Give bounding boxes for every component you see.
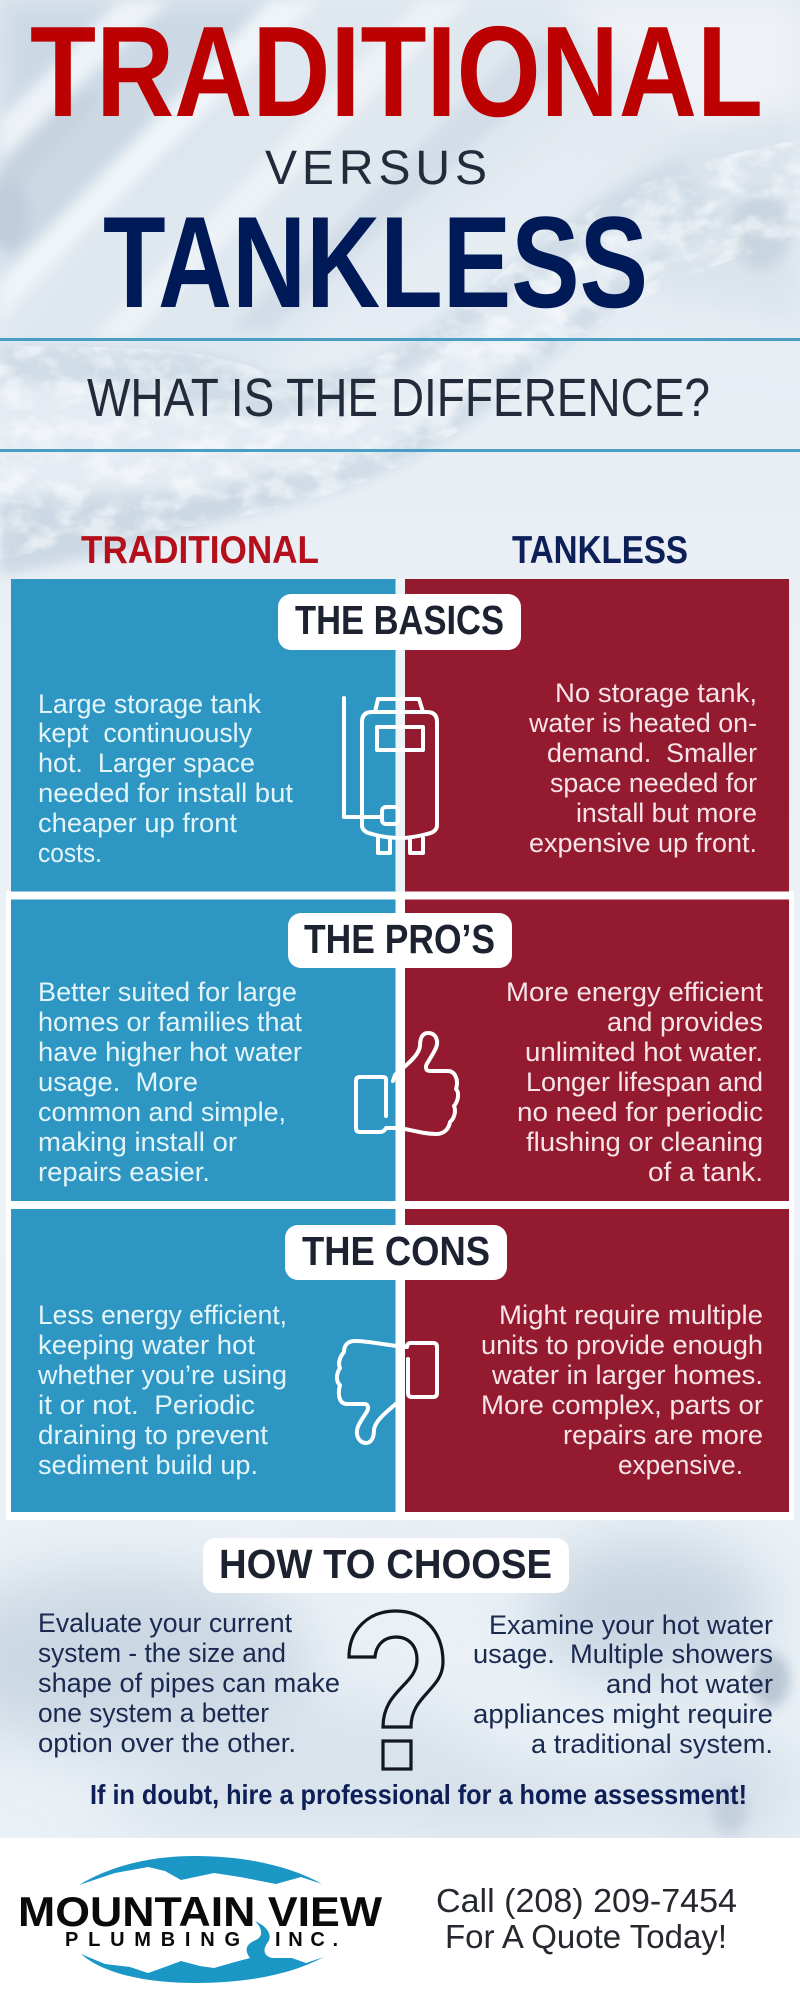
heading chip: the basics: THE BASICS bbox=[295, 597, 504, 643]
tankless basics text: water is heated on- bbox=[528, 708, 757, 738]
divider line bottom bbox=[0, 449, 800, 452]
tankless basics text: No storage tank, bbox=[555, 678, 757, 708]
heading chip: the pros: THE PRO’S bbox=[304, 916, 495, 962]
traditional cons text: Less energy efficient, bbox=[38, 1300, 287, 1330]
white panel backing bbox=[6, 891, 794, 1520]
left choose text bbox=[38, 1608, 340, 1758]
right choose text: appliances might require bbox=[473, 1699, 773, 1729]
traditional basics text: needed for install but bbox=[38, 778, 293, 808]
traditional pros text: Better suited for large bbox=[38, 977, 297, 1007]
left choose text: Evaluate your current bbox=[38, 1608, 292, 1638]
logo top arc bbox=[79, 1856, 322, 1885]
icon: thumbs down bbox=[337, 1341, 437, 1443]
divider line top bbox=[0, 338, 800, 341]
icon: question mark bbox=[349, 1611, 443, 1769]
tankless basics text: demand. Smaller bbox=[547, 738, 757, 768]
panel: the cons bbox=[11, 1209, 789, 1512]
traditional pros text: have higher hot water bbox=[38, 1037, 302, 1067]
tankless pros text: of a tank. bbox=[648, 1157, 763, 1187]
logo inc: INC. bbox=[275, 1929, 338, 1951]
cons tankless background bbox=[405, 1209, 789, 1512]
title: VERSUS: VERSUS bbox=[265, 142, 487, 195]
section: how to choose bbox=[38, 1538, 773, 1810]
callout: hire a professional: If in doubt, hire a professional for a home assessment! bbox=[90, 1779, 747, 1810]
cons traditional background bbox=[11, 1209, 396, 1512]
right choose text bbox=[473, 1610, 773, 1759]
tankless pros text: no need for periodic bbox=[517, 1097, 763, 1127]
footer band bbox=[0, 1838, 800, 2000]
icon: water heater bbox=[344, 698, 437, 853]
tankless cons text: More complex, parts or bbox=[481, 1390, 763, 1420]
right choose text: and hot water bbox=[606, 1669, 773, 1699]
traditional pros text: homes or families that bbox=[38, 1007, 302, 1037]
tankless basics text: install but more bbox=[576, 798, 757, 828]
tankless cons text: Might require multiple bbox=[499, 1300, 763, 1330]
traditional basics text: costs. bbox=[38, 838, 102, 868]
traditional cons text: sediment build up. bbox=[38, 1450, 258, 1480]
traditional cons text bbox=[37, 1300, 287, 1480]
tankless pros text bbox=[506, 977, 764, 1187]
tankless cons text: repairs are more bbox=[563, 1420, 763, 1450]
right choose text: a traditional system. bbox=[531, 1729, 773, 1759]
tankless pros text: More energy efficient bbox=[506, 977, 764, 1007]
panel: the basics bbox=[11, 579, 789, 892]
traditional cons text: keeping water hot bbox=[38, 1330, 256, 1360]
tankless pros text: flushing or cleaning bbox=[526, 1127, 763, 1157]
call to action: Call (208) 209-7454 bbox=[436, 1882, 737, 1919]
basics traditional background bbox=[11, 579, 396, 892]
traditional cons text: draining to prevent bbox=[38, 1420, 269, 1450]
tankless basics text: space needed for bbox=[550, 768, 757, 798]
traditional basics text: cheaper up front bbox=[38, 808, 237, 838]
logo wordmark: MOUNTAIN VIEW bbox=[18, 1888, 382, 1935]
title: TANKLESS: TANKLESS bbox=[103, 189, 648, 335]
tankless cons text: expensive. bbox=[618, 1450, 743, 1480]
left choose text: option over the other. bbox=[38, 1728, 296, 1758]
traditional basics text: Large storage tank bbox=[38, 689, 261, 719]
traditional pros text: repairs easier. bbox=[38, 1157, 210, 1187]
traditional basics text: hot. Larger space bbox=[38, 748, 255, 778]
pros tankless background bbox=[405, 900, 789, 1201]
right choose text: usage. Multiple showers bbox=[473, 1639, 773, 1669]
traditional basics text: kept continuously bbox=[38, 718, 252, 748]
traditional pros text bbox=[38, 977, 302, 1187]
tankless pros text: Longer lifespan and bbox=[526, 1067, 763, 1097]
call to action: For A Quote Today! bbox=[445, 1918, 727, 1955]
tankless pros text: unlimited hot water. bbox=[525, 1037, 763, 1067]
tankless basics text bbox=[528, 678, 757, 858]
logo bottom arc with river bbox=[81, 1921, 324, 1983]
traditional pros text: common and simple, bbox=[38, 1097, 286, 1127]
tankless cons text: units to provide enough bbox=[481, 1330, 763, 1360]
traditional cons text: whether you’re using bbox=[37, 1360, 287, 1390]
heading chip: the cons: THE CONS bbox=[302, 1228, 490, 1274]
tankless pros text: and provides bbox=[607, 1007, 763, 1037]
basics tankless background bbox=[405, 579, 789, 892]
logo plumbing: PLUMBING bbox=[65, 1929, 240, 1951]
traditional pros text: usage. More bbox=[38, 1067, 198, 1097]
pros traditional background bbox=[11, 900, 396, 1201]
left choose text: shape of pipes can make bbox=[38, 1668, 340, 1698]
right choose text: Examine your hot water bbox=[489, 1610, 773, 1640]
traditional pros text: making install or bbox=[38, 1127, 237, 1157]
traditional cons text: it or not. Periodic bbox=[38, 1390, 255, 1420]
call to action bbox=[436, 1882, 737, 1955]
logo: mountain view plumbing bbox=[18, 1856, 382, 1983]
left choose text: system - the size and bbox=[38, 1638, 286, 1668]
tankless basics text: expensive up front. bbox=[529, 828, 757, 858]
subtitle: WHAT IS THE DIFFERENCE? bbox=[87, 368, 710, 428]
heading chip: how to choose: HOW TO CHOOSE bbox=[219, 1541, 552, 1587]
traditional basics text bbox=[38, 689, 293, 868]
column heading: traditional: TRADITIONAL bbox=[81, 529, 319, 572]
tankless cons text: water in larger homes. bbox=[491, 1360, 763, 1390]
tankless cons text bbox=[481, 1300, 763, 1480]
icon: thumbs up bbox=[356, 1033, 458, 1134]
panel: the pros bbox=[11, 900, 789, 1201]
left choose text: one system a better bbox=[38, 1698, 269, 1728]
column heading: tankless: TANKLESS bbox=[512, 529, 688, 572]
